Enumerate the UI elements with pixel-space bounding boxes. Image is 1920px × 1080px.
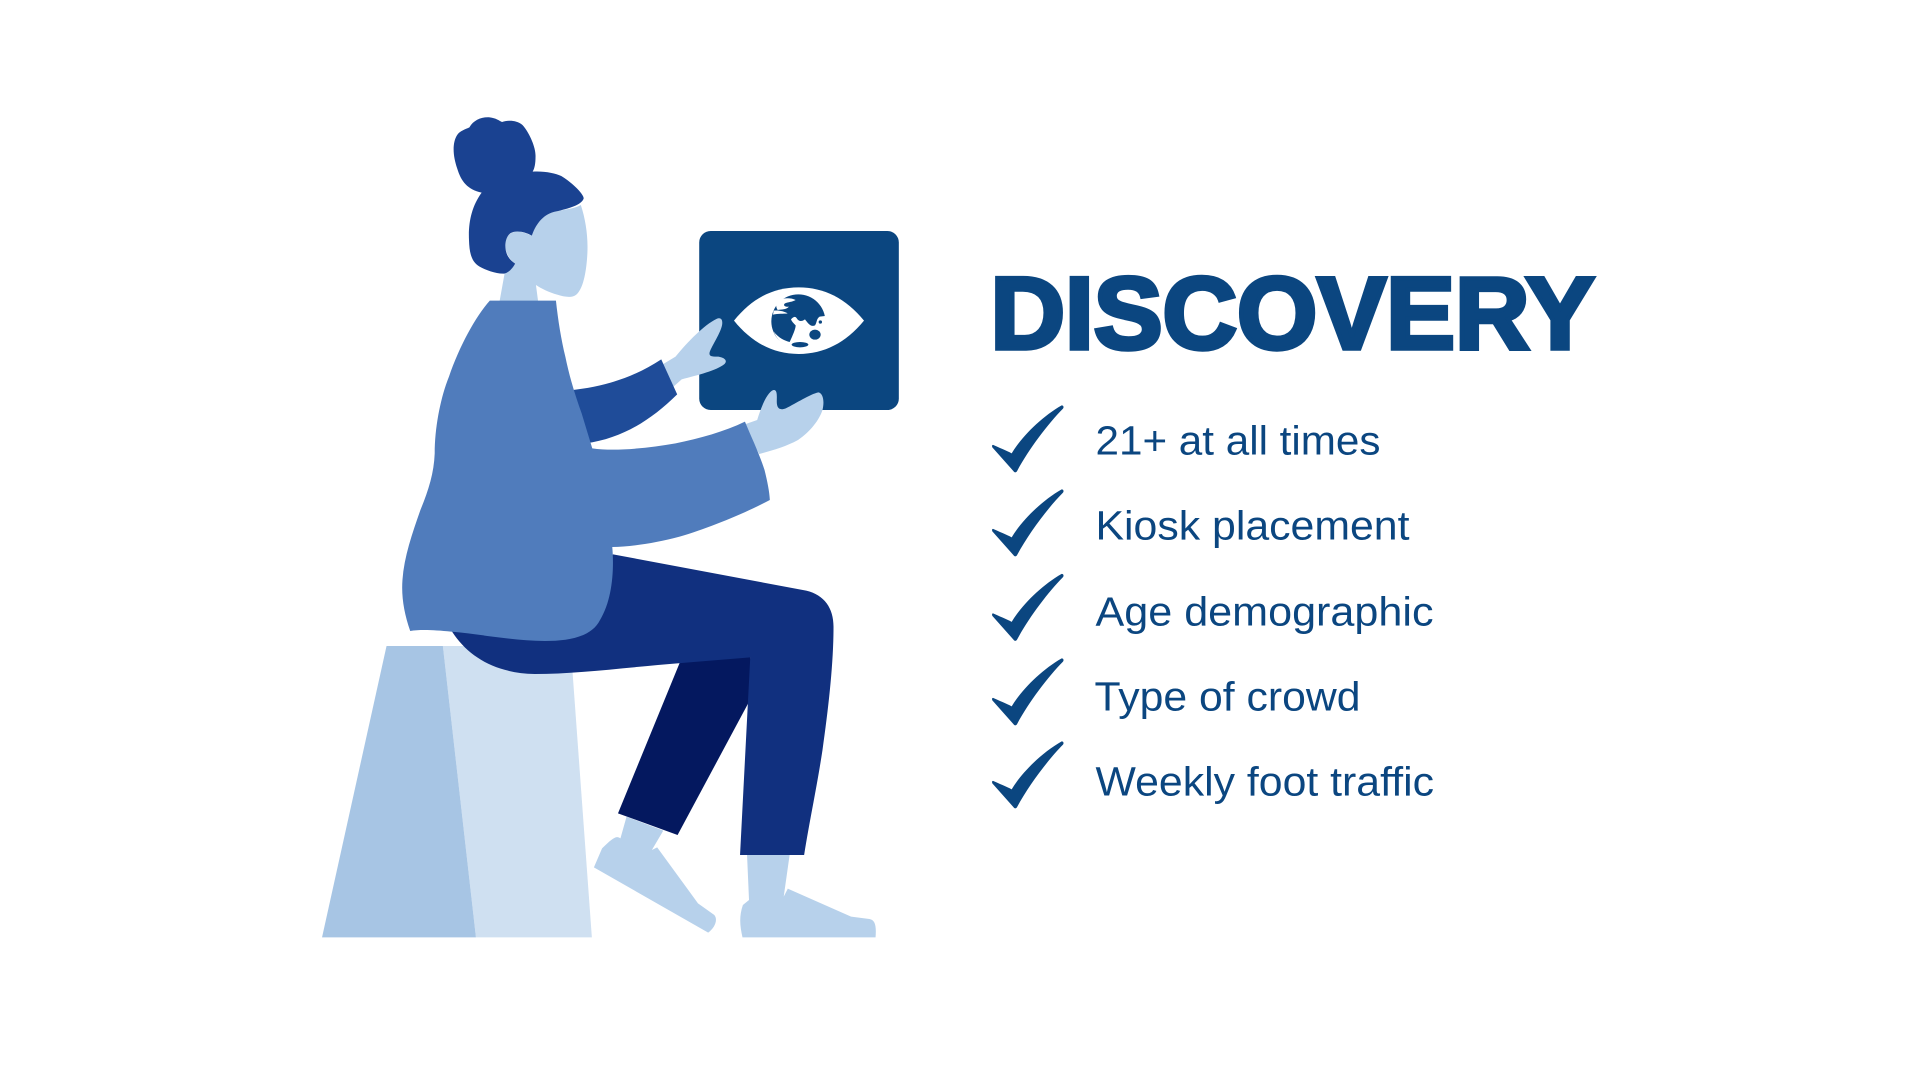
globe	[771, 294, 826, 349]
far sleeve	[569, 359, 677, 443]
icon: eye with globe	[734, 287, 864, 354]
hair with bun	[454, 117, 584, 274]
item: Age demographic: Age demographic	[1096, 588, 1434, 634]
back foot	[594, 817, 716, 933]
neck, face and ear	[499, 205, 588, 303]
item: Weekly foot traffic: Weekly foot traffic	[1096, 758, 1434, 804]
sweater torso and near sleeve	[402, 301, 770, 641]
item: 21+ at all times	[992, 405, 1380, 472]
illustration: woman seated on stool holding tablet	[322, 117, 899, 937]
trousers	[451, 554, 834, 855]
item: Age demographic	[992, 574, 1434, 641]
near hand	[743, 390, 823, 454]
checklist	[992, 405, 1434, 808]
item: Weekly foot traffic	[992, 741, 1434, 808]
front foot	[740, 853, 876, 937]
back leg	[618, 655, 751, 835]
item: Type of crowd	[992, 658, 1360, 725]
eye shape	[734, 287, 864, 354]
tablet panel	[699, 231, 899, 410]
item: 21+ at all times: 21+ at all times	[1096, 418, 1380, 464]
item: Type of crowd: Type of crowd	[1094, 674, 1360, 720]
far hand	[663, 318, 726, 387]
item: Kiosk placement	[992, 489, 1410, 556]
stool	[322, 646, 592, 937]
heading: DISCOVERY	[990, 256, 1594, 370]
item: Kiosk placement: Kiosk placement	[1096, 502, 1410, 548]
